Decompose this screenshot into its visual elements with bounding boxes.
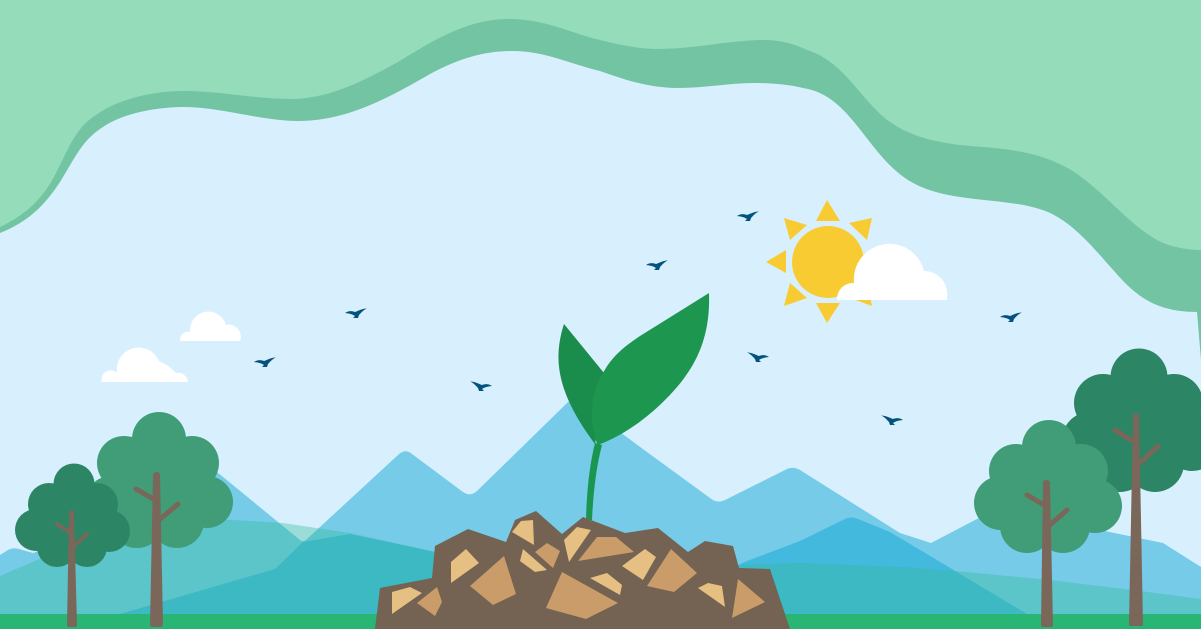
ground [0, 614, 1201, 629]
sun [766, 200, 872, 323]
top wave: lighter band [0, 0, 1201, 250]
cloud: in front of sun [837, 244, 947, 300]
tree: right dark [1062, 348, 1201, 626]
sun rays [766, 200, 872, 323]
back leaf [558, 324, 604, 444]
mid blue mountains [120, 518, 1027, 629]
tree: left small [15, 464, 130, 627]
tree: left large [85, 412, 233, 627]
front leaf [592, 293, 709, 445]
soil mound [375, 511, 790, 629]
cloud: upper left [180, 312, 241, 341]
tree: right light [974, 420, 1122, 627]
top wave: darker band [0, 0, 1201, 360]
back mountains [0, 400, 1201, 629]
light rocks [392, 520, 725, 614]
seedling [558, 293, 709, 520]
cloud: lower left [102, 348, 188, 382]
stem [586, 443, 602, 520]
birds [254, 212, 1022, 425]
sun disc [792, 226, 864, 298]
translucent teal hills [0, 520, 1201, 629]
dark rocks [417, 537, 765, 619]
